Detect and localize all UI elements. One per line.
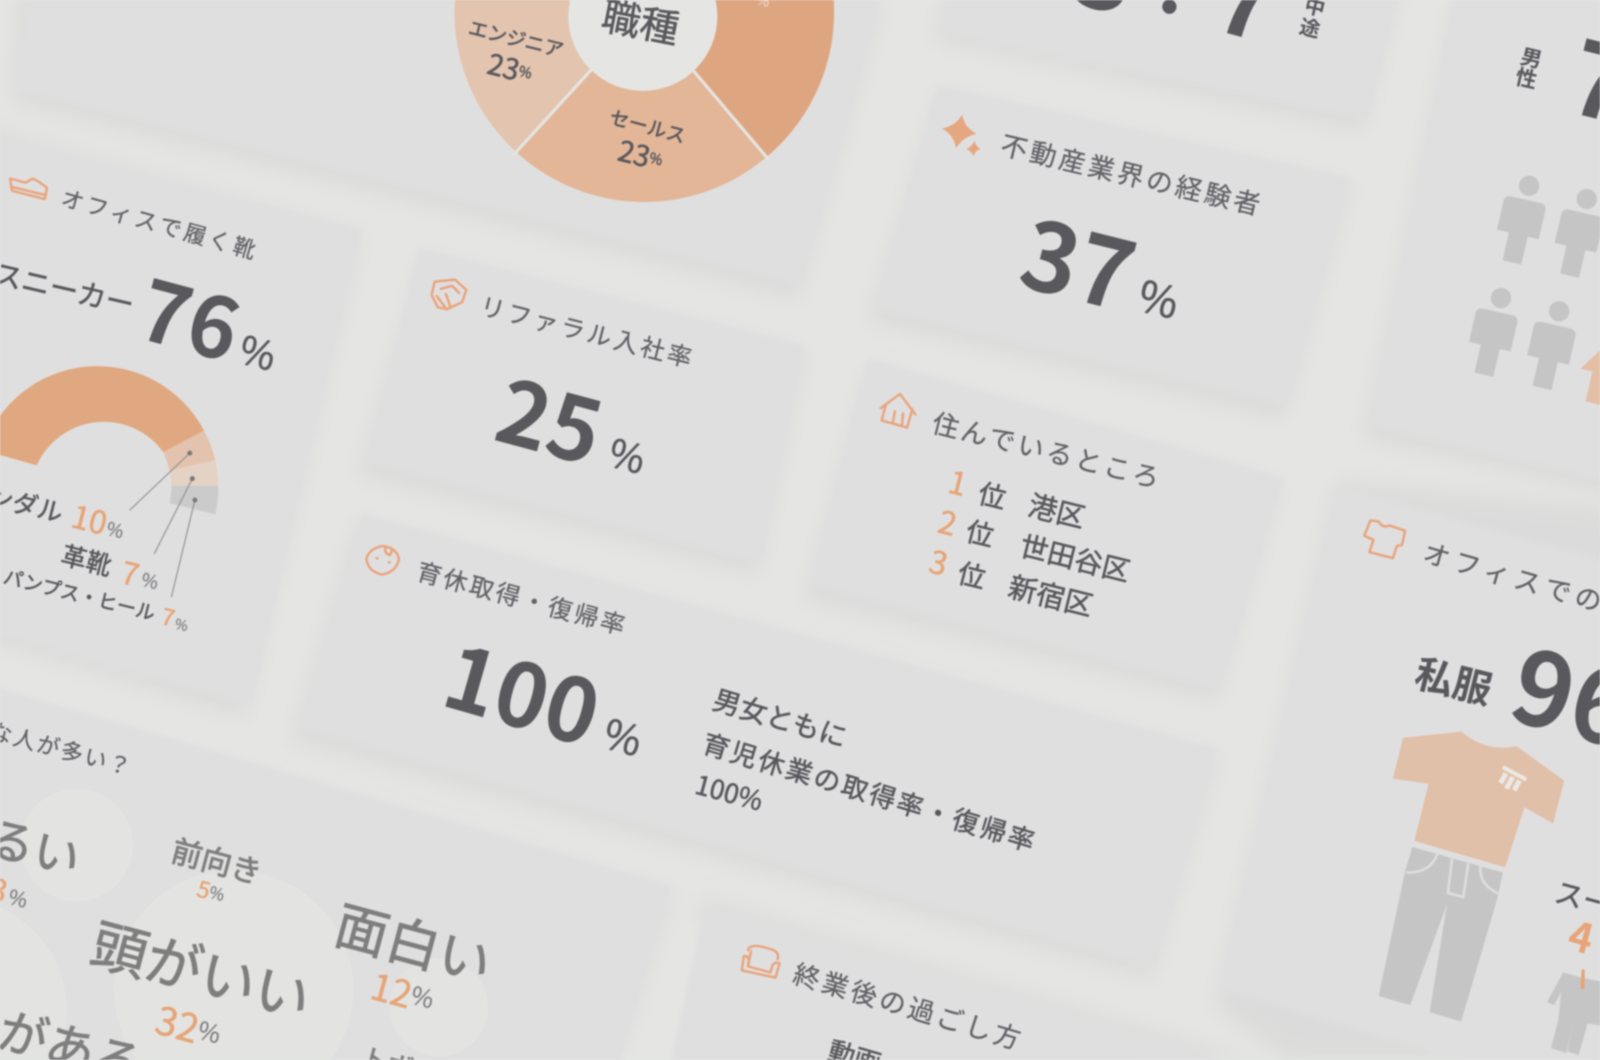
panel: residence bbox=[804, 361, 1281, 702]
icon: t-shirt bbox=[1364, 520, 1405, 558]
illustration: trousers bbox=[1379, 847, 1503, 1021]
value: 100 bbox=[431, 607, 616, 772]
label: leather shoes: 革靴 bbox=[58, 535, 116, 583]
heading: オフィスで履く靴 bbox=[58, 181, 263, 266]
donut chart: job types bbox=[454, 0, 834, 202]
ranking: 新宿区 bbox=[1004, 565, 1098, 625]
panel: parental leave bbox=[291, 516, 1219, 980]
label: male: 性 bbox=[1513, 60, 1540, 95]
panel: referral rate bbox=[357, 251, 806, 576]
label: pumps: パンプス・ヒール bbox=[1, 562, 158, 626]
label: sandal: % bbox=[104, 515, 127, 544]
value: funny: 12% bbox=[365, 957, 441, 1025]
icon: house bbox=[881, 394, 915, 428]
label: leather shoes bbox=[58, 535, 161, 595]
illustration: suit bbox=[1547, 969, 1600, 1055]
panel: gender ratio bbox=[1362, 0, 1600, 500]
illustration: t-shirt bbox=[1393, 732, 1564, 867]
label: pumps: % bbox=[173, 613, 191, 636]
panel: personality bbox=[0, 682, 673, 1060]
icon: baby bbox=[366, 546, 399, 575]
word: smart: 頭がいい bbox=[83, 900, 321, 1037]
label: male: 男 bbox=[1518, 40, 1546, 75]
panel: new graduate and mid-career bbox=[934, 0, 1403, 133]
ranking: 2 bbox=[934, 497, 962, 546]
ranking: 港区 bbox=[1024, 483, 1090, 537]
panel: office clothing bbox=[1214, 480, 1600, 1060]
label: sales: セールス bbox=[607, 102, 689, 149]
panel: real estate experience bbox=[867, 88, 1352, 420]
icon group: people bbox=[1462, 171, 1600, 410]
icon: handshake bbox=[432, 280, 466, 309]
label: engineer: エンジニア bbox=[466, 13, 567, 63]
label: sandal: 10 bbox=[67, 492, 112, 545]
unit: bright: % bbox=[5, 880, 31, 914]
word: funny: 面白い bbox=[327, 883, 501, 999]
heading: 終業後の過ごし方 bbox=[789, 952, 1029, 1058]
colon bbox=[1162, 0, 1177, 14]
label: pumps: 7 bbox=[158, 599, 178, 633]
heading: 不動産業界の経験者 bbox=[997, 124, 1268, 223]
heading: 住んでいるところ bbox=[929, 402, 1167, 497]
value: positive: 5% bbox=[194, 872, 229, 910]
leader lines bbox=[130, 451, 197, 597]
unit: % bbox=[234, 319, 283, 383]
label: mid-career: 途 bbox=[1297, 10, 1324, 43]
unit: % bbox=[1133, 262, 1186, 332]
note: 育児休業の取得率・復帰率 bbox=[698, 722, 1042, 860]
panel: job type donut bbox=[10, 0, 884, 300]
note: 男女ともに bbox=[709, 678, 852, 755]
unit: % bbox=[597, 701, 650, 768]
value: 37 bbox=[1009, 179, 1150, 339]
value: engineer: 23% bbox=[483, 42, 537, 93]
heading: 育休取得・復帰率 bbox=[413, 553, 632, 643]
bubbles bbox=[0, 789, 488, 1060]
ranking: 位 bbox=[975, 471, 1011, 517]
panel: after work bbox=[673, 898, 1255, 1060]
value: smart: 32% bbox=[150, 990, 228, 1060]
label: leather shoes: % bbox=[139, 566, 161, 595]
ranking: 位 bbox=[954, 551, 991, 596]
label: male bbox=[1513, 40, 1546, 95]
label: plain clothes: 私服 bbox=[1410, 643, 1499, 716]
icon: sofa bbox=[742, 946, 780, 978]
icon: shoe bbox=[10, 179, 47, 199]
note: 100% bbox=[691, 763, 768, 819]
value: suit: 4 bbox=[1562, 903, 1600, 966]
label: leather shoes: 7 bbox=[117, 548, 144, 595]
value: sales: 23% bbox=[614, 129, 668, 179]
half donut chart bbox=[0, 366, 218, 514]
ranking: 位 bbox=[962, 509, 999, 554]
ranking: 世田谷区 bbox=[1016, 524, 1135, 591]
icon: sparkle bbox=[942, 114, 981, 156]
label: sandal bbox=[0, 470, 127, 545]
heading: リファラル入社率 bbox=[477, 288, 699, 376]
ranking: 1 bbox=[944, 457, 972, 506]
value: 76 bbox=[127, 244, 254, 387]
unit: % bbox=[603, 422, 652, 486]
panel: shoes bbox=[0, 123, 362, 718]
ranking bbox=[925, 457, 1135, 625]
label: mid-career bbox=[1297, 0, 1329, 43]
ranking: 3 bbox=[925, 537, 953, 586]
value: 25 bbox=[485, 342, 617, 491]
word: positive: 前向き bbox=[167, 826, 268, 893]
